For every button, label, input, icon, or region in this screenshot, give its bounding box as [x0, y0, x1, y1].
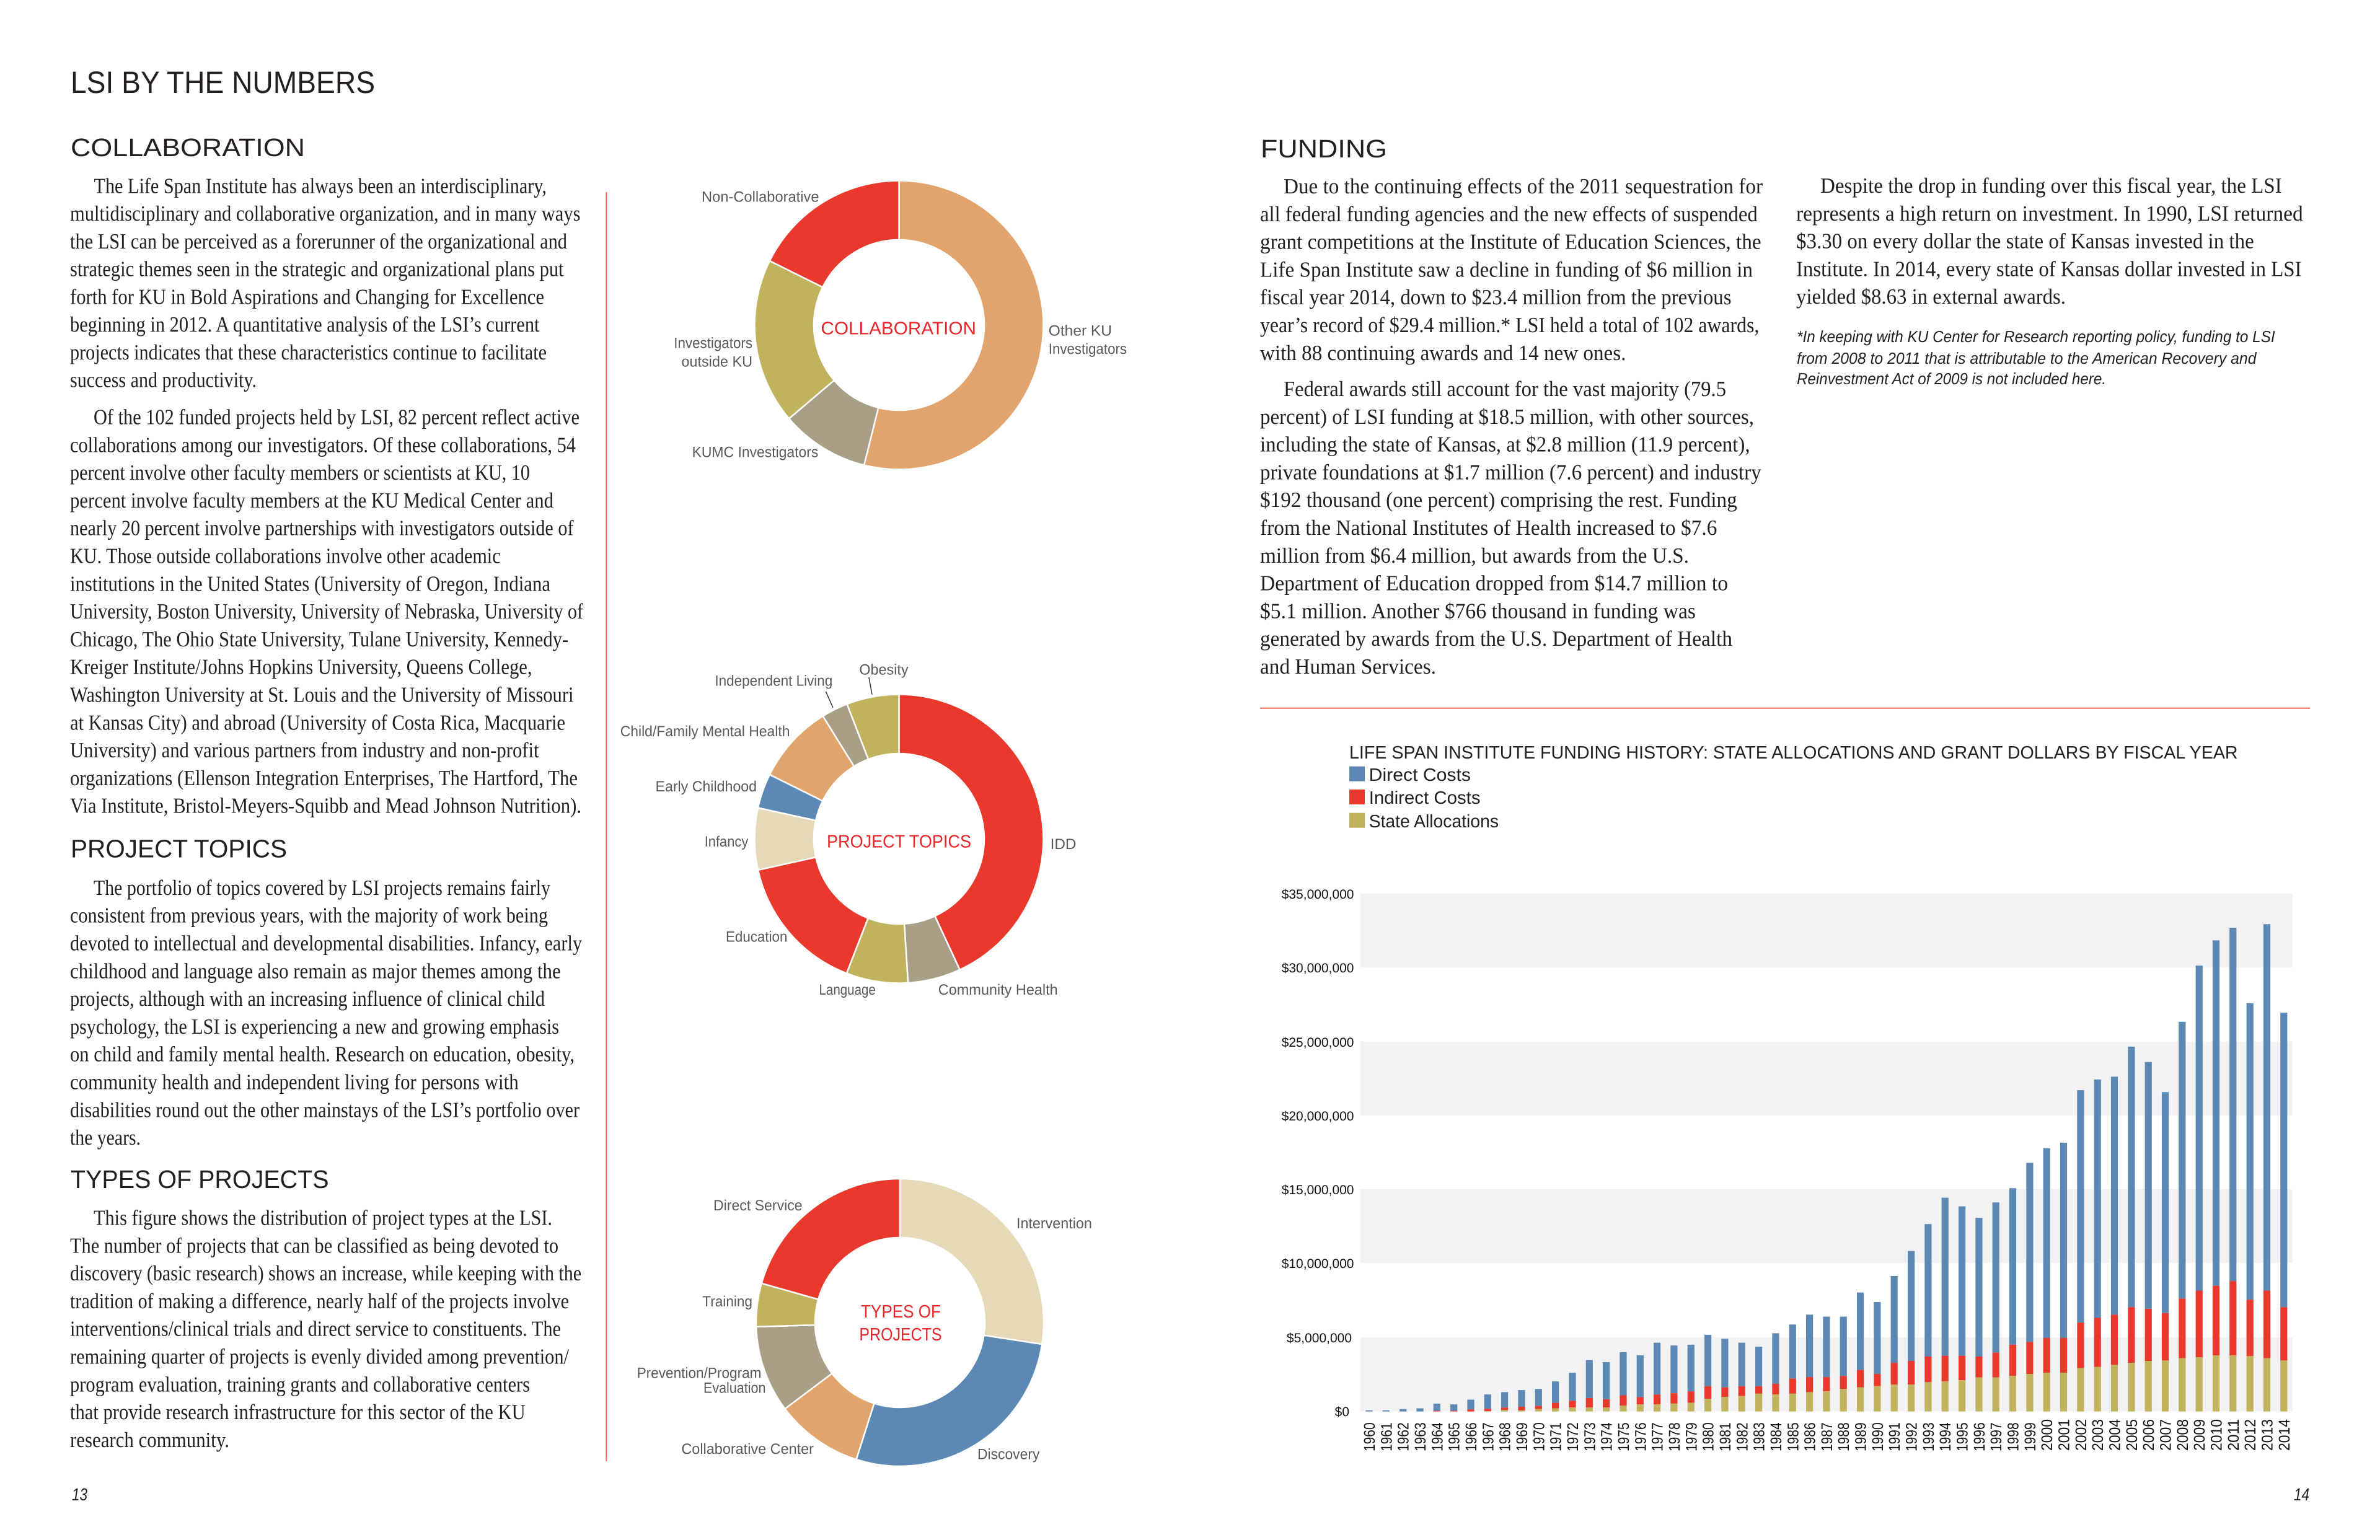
text block: collaboration paragraph 2: Via Institute, Bristol-Meyers-Squibb and Mead Johnson Nutrition).	[70, 794, 581, 818]
x axis year labels: 1975	[1615, 1422, 1633, 1451]
series: state allocations	[1488, 1355, 2284, 1412]
x axis year labels: 1982	[1734, 1422, 1751, 1451]
text block: funding paragraph 2: from the National Institutes of Health increased to $7.6	[1260, 516, 1717, 540]
segment: community health	[904, 916, 960, 983]
text block: collaboration paragraph 1: beginning in 2012. A quantitative analysis of the LSI’s current	[70, 312, 540, 337]
label: training: Training	[702, 1293, 752, 1310]
footnote	[1797, 327, 2275, 388]
segment: collaborative center	[785, 1373, 874, 1459]
segment: infancy	[755, 808, 816, 870]
x axis year labels: 1992	[1903, 1422, 1921, 1451]
text block: funding paragraph 2: Department of Education dropped from $14.7 million to	[1260, 571, 1728, 596]
x axis year labels: 1983	[1751, 1422, 1768, 1451]
text block: return on investment: Institute. In 2014, every state of Kansas dollar invested in LSI	[1796, 257, 2302, 281]
x axis year labels: 2012	[2242, 1419, 2259, 1451]
x axis year labels: 1980	[1700, 1422, 1717, 1451]
x axis year labels: 1972	[1564, 1422, 1582, 1451]
donut chart: types of projects	[637, 1179, 1092, 1466]
heading: project topics: PROJECT TOPICS	[71, 834, 287, 863]
text block: project topics: on child and family mental health. Research on education, obesity,	[70, 1042, 575, 1067]
text block: collaboration paragraph 2: percent involve faculty members at the KU Medical Center and	[70, 488, 553, 513]
segment: other KU investigators	[864, 181, 1043, 469]
segment: education	[758, 857, 868, 974]
chart title: LIFE SPAN INSTITUTE FUNDING HISTORY: STATE ALLOCATIONS AND GRANT DOLLARS BY FISCAL YEAR	[1349, 743, 2238, 763]
text block: types of projects: tradition of making a difference, nearly half of the projects involve	[70, 1289, 569, 1313]
text block: collaboration paragraph 2: percent involve other faculty members or scientists at KU, 10	[70, 460, 530, 485]
segment: intervention	[900, 1179, 1044, 1344]
vertical divider	[606, 192, 607, 1461]
text block: collaboration paragraph 2: institutions in the United States (University of Oregon, Indiana	[70, 571, 550, 596]
legend item: state allocations: State Allocations	[1369, 812, 1499, 832]
x axis year labels: 1987	[1818, 1422, 1836, 1451]
bars	[1369, 924, 2284, 1412]
text block: collaboration paragraph 2: collaborations among our investigators. Of these collaborations, 54	[70, 433, 576, 457]
x axis year labels: 1979	[1683, 1422, 1700, 1451]
footnote: from 2008 to 2011 that is attributable to the American Recovery and	[1797, 349, 2257, 367]
x axis year labels: 2000	[2038, 1419, 2056, 1451]
x axis year labels: 1996	[1971, 1422, 1988, 1451]
text block: types of projects: discovery (basic research) shows an increase, while keeping with the	[70, 1261, 581, 1285]
x axis year labels: 1974	[1598, 1422, 1616, 1451]
label: prevention/program evaluation	[637, 1365, 765, 1397]
segment: child/family mental health	[770, 716, 854, 801]
x axis year labels: 1961	[1378, 1422, 1395, 1451]
label: prevention/program evaluation: Prevention/Program	[637, 1365, 761, 1381]
text block: collaboration paragraph 1: success and productivity.	[70, 368, 257, 392]
text block: collaboration paragraph 2	[70, 405, 583, 818]
text block: project topics: consistent from previous years, with the majority of work being	[70, 904, 548, 928]
text block: project topics: childhood and language also remain as major themes among the	[70, 959, 561, 983]
text block: types of projects	[70, 1206, 581, 1452]
x axis year labels: 1966	[1463, 1422, 1480, 1451]
series: indirect costs	[1437, 1281, 2284, 1412]
text block: return on investment: Despite the drop in funding over this fiscal year, the LSI	[1820, 174, 2282, 198]
text block: project topics: psychology, the LSI is experiencing a new and growing emphasis	[70, 1014, 559, 1039]
center label: types of projects: TYPES OF	[861, 1302, 941, 1322]
x axis year labels: 1989	[1853, 1422, 1870, 1451]
text block: collaboration paragraph 1	[70, 174, 580, 392]
x axis year labels: 1960	[1361, 1422, 1378, 1451]
text block: collaboration paragraph 1: strategic themes seen in the strategic and organizational plans put	[70, 257, 564, 281]
label: KUMC investigators: KUMC Investigators	[692, 444, 818, 461]
label: other KU investigators: Investigators	[1049, 341, 1127, 358]
x axis year labels: 1994	[1937, 1422, 1954, 1451]
text block: types of projects: This figure shows the distribution of project types at the LSI.	[94, 1206, 552, 1230]
y axis labels: $10,000,000	[1282, 1257, 1354, 1271]
text block: funding paragraph 1: all federal funding agencies and the new effects of suspended	[1260, 202, 1758, 226]
x axis year labels: 1986	[1802, 1422, 1819, 1451]
text block: types of projects: research community.	[70, 1428, 229, 1452]
x axis year labels: 1997	[1988, 1422, 2005, 1451]
text block: return on investment: yielded $8.63 in external awards.	[1796, 284, 2066, 309]
text block: project topics: devoted to intellectual and developmental disabilities. Infancy, early	[70, 931, 582, 956]
text block: types of projects: interventions/clinical trials and direct service to constituents. The	[70, 1317, 561, 1341]
label: child/family mental health: Child/Family Mental Health	[620, 723, 790, 740]
segment: language	[847, 918, 908, 983]
x axis year labels	[1361, 1419, 2293, 1451]
text block: types of projects: remaining quarter of projects is evenly divided among prevention/	[70, 1345, 569, 1368]
text block: funding paragraph 2: private foundations at $1.7 million (7.6 percent) and industry	[1260, 460, 1761, 484]
text block: funding paragraph 1: grant competitions at the Institute of Education Sciences, the	[1260, 230, 1761, 254]
text block: project topics: disabilities round out the other mainstays of the LSI’s portfolio over	[70, 1098, 580, 1122]
segment: training	[756, 1283, 818, 1327]
x axis year labels: 1963	[1412, 1422, 1429, 1451]
x axis year labels: 1971	[1548, 1422, 1565, 1451]
title: LSI BY THE NUMBERS	[71, 65, 375, 100]
segment: obesity	[847, 694, 899, 759]
label: non-collaborative: Non-Collaborative	[702, 189, 819, 206]
segment: independent living	[823, 704, 868, 767]
y axis labels: $5,000,000	[1287, 1331, 1352, 1345]
text block: collaboration paragraph 2: Washington University at St. Louis and the University of Missouri	[70, 683, 574, 706]
page number 13: 13	[72, 1485, 87, 1504]
x axis year labels: 2011	[2225, 1419, 2242, 1451]
legend item: indirect costs: Indirect Costs	[1369, 788, 1481, 808]
x axis year labels: 1967	[1479, 1422, 1497, 1451]
label: intervention: Intervention	[1016, 1215, 1092, 1232]
label: direct service: Direct Service	[713, 1197, 803, 1214]
y axis labels: $20,000,000	[1282, 1109, 1354, 1124]
text block: funding paragraph 2: million from $6.4 million, but awards from the U.S.	[1260, 543, 1689, 568]
text block: return on investment	[1796, 174, 2303, 309]
x axis year labels: 1991	[1886, 1422, 1903, 1451]
x axis year labels: 1985	[1784, 1422, 1802, 1451]
x axis year labels: 2007	[2157, 1419, 2174, 1451]
y axis labels: $25,000,000	[1282, 1036, 1354, 1050]
heading: types of projects: TYPES OF PROJECTS	[71, 1165, 329, 1194]
text block: funding paragraph 1	[1260, 174, 1763, 365]
x axis year labels: 2014	[2276, 1419, 2293, 1451]
segment: IDD	[899, 694, 1043, 970]
text block: funding paragraph 1: with 88 continuing awards and 14 new ones.	[1260, 341, 1626, 365]
label: prevention/program evaluation: Evaluation	[703, 1380, 765, 1397]
bar chart: funding history	[1282, 743, 2293, 1451]
text block: collaboration paragraph 1: forth for KU in Bold Aspirations and Changing for Excellence	[70, 285, 544, 309]
x axis year labels: 2005	[2123, 1419, 2141, 1451]
center label: collaboration: COLLABORATION	[821, 319, 976, 338]
segment: investigators outside KU	[755, 261, 834, 419]
text block: collaboration paragraph 2: Chicago, The Ohio State University, Tulane University, Kennedy-	[70, 627, 568, 651]
leader line: independent living	[826, 692, 833, 708]
donut chart: project topics	[620, 661, 1076, 998]
legend item: direct costs: Direct Costs	[1369, 765, 1471, 785]
x axis year labels: 2002	[2073, 1419, 2090, 1451]
text block: collaboration paragraph 1: multidisciplinary and collaborative organization, and in many ways	[70, 201, 580, 226]
text block: types of projects: program evaluation, training grants and collaborative centers	[70, 1372, 530, 1396]
horizontal divider	[1260, 708, 2310, 709]
footnote: Reinvestment Act of 2009 is not included here.	[1797, 369, 2106, 388]
x axis year labels: 2006	[2140, 1419, 2157, 1451]
text block: collaboration paragraph 2: organizations (Ellenson Integration Enterprises, The Hartford, The	[70, 766, 578, 790]
heading: collaboration: COLLABORATION	[71, 133, 305, 162]
heading: funding: FUNDING	[1261, 134, 1387, 163]
text block: collaboration paragraph 1: The Life Span Institute has always been an interdisciplinary,	[94, 174, 547, 198]
label: community health: Community Health	[938, 982, 1058, 998]
x axis year labels: 2008	[2174, 1419, 2192, 1451]
segment: prevention/program evaluation	[756, 1325, 832, 1409]
text block: return on investment: $3.30 on every dollar the state of Kansas invested in the	[1796, 229, 2254, 253]
text block: funding paragraph 1: Due to the continuing effects of the 2011 sequestration for	[1284, 174, 1763, 198]
x axis year labels: 1964	[1429, 1422, 1446, 1451]
y axis labels	[1282, 887, 1354, 1419]
x axis year labels: 1990	[1869, 1422, 1887, 1451]
page number 14: 14	[2294, 1485, 2309, 1504]
text block: project topics: projects, although with an increasing influence of clinical child	[70, 987, 545, 1011]
text block: collaboration paragraph 2: Of the 102 funded projects held by LSI, 82 percent reflect active	[94, 405, 580, 429]
text block: types of projects: The number of projects that can be classified as being devoted to	[70, 1233, 558, 1257]
segment: KUMC investigators	[789, 381, 878, 465]
label: independent living: Independent Living	[715, 673, 832, 690]
text block: collaboration paragraph 1: the LSI can be perceived as a forerunner of the organizational and	[70, 229, 567, 253]
text block: collaboration paragraph 2: nearly 20 percent involve partnerships with investigators outside of	[70, 516, 574, 540]
text block: types of projects: that provide research infrastructure for this sector of the KU	[70, 1400, 526, 1424]
text block: collaboration paragraph 2: Kreiger Institute/Johns Hopkins University, Queens College,	[70, 655, 532, 679]
text block: collaboration paragraph 2: University, Boston University, University of Nebraska, University of	[70, 599, 583, 623]
leader line: obesity	[869, 677, 872, 695]
center label: types of projects	[859, 1302, 942, 1345]
segment: discovery	[857, 1335, 1042, 1466]
label: obesity: Obesity	[859, 661, 909, 678]
x axis year labels: 2003	[2089, 1419, 2107, 1451]
text block: funding paragraph 2: generated by awards from the U.S. Department of Health	[1260, 627, 1732, 651]
segment: non-collaborative	[770, 181, 899, 287]
label: discovery: Discovery	[977, 1446, 1039, 1463]
series: direct costs	[1369, 924, 2284, 1412]
x axis year labels: 1973	[1581, 1422, 1598, 1451]
x axis year labels: 1999	[2022, 1422, 2039, 1451]
x axis year labels: 2009	[2191, 1419, 2208, 1451]
text block: return on investment: represents a high return on investment. In 1990, LSI returned	[1796, 201, 2303, 226]
text block: funding paragraph 2	[1260, 377, 1761, 679]
text block: collaboration paragraph 2: University) and various partners from industry and non-profit	[70, 738, 539, 762]
x axis year labels: 1969	[1514, 1422, 1531, 1451]
footnote: *In keeping with KU Center for Research reporting policy, funding to LSI	[1797, 327, 2275, 346]
x axis year labels: 1998	[2004, 1422, 2022, 1451]
label: investigators outside KU	[674, 335, 752, 371]
segment: direct service	[762, 1179, 900, 1300]
text block: collaboration paragraph 2: KU. Those outside collaborations involve other academic	[70, 544, 501, 568]
x axis year labels: 1970	[1530, 1422, 1548, 1451]
y axis labels: $35,000,000	[1282, 887, 1354, 902]
x axis year labels: 1962	[1395, 1422, 1413, 1451]
x axis year labels: 1978	[1666, 1422, 1683, 1451]
text block: project topics: The portfolio of topics covered by LSI projects remains fairly	[94, 876, 550, 900]
text block: funding paragraph 1: Life Span Institute saw a decline in funding of $6 million in	[1260, 257, 1753, 281]
label: infancy: Infancy	[705, 834, 748, 850]
x axis year labels: 2004	[2106, 1419, 2123, 1451]
label: collaborative center: Collaborative Center	[681, 1441, 814, 1458]
text block: funding paragraph 2: Federal awards still account for the vast majority (79.5	[1284, 377, 1726, 401]
text block: project topics: community health and independent living for persons with	[70, 1070, 519, 1094]
x axis year labels: 1977	[1649, 1422, 1667, 1451]
text block: funding paragraph 2: percent) of LSI funding at $18.5 million, with other sources,	[1260, 405, 1754, 429]
y axis labels: $0	[1335, 1405, 1349, 1419]
label: language: Language	[819, 982, 876, 998]
text block: collaboration paragraph 1: projects indicates that these characteristics continue to facilitate	[70, 340, 547, 364]
y axis labels: $30,000,000	[1282, 961, 1354, 975]
text block: funding paragraph 2: $5.1 million. Another $766 thousand in funding was	[1260, 599, 1696, 623]
label: early childhood: Early Childhood	[656, 778, 757, 795]
label: education: Education	[726, 929, 787, 946]
x axis year labels: 1965	[1446, 1422, 1463, 1451]
x axis year labels: 1995	[1954, 1422, 1972, 1451]
label: investigators outside KU: Investigators	[674, 335, 752, 352]
label: investigators outside KU: outside KU	[681, 354, 752, 371]
center label: project topics: PROJECT TOPICS	[827, 832, 971, 852]
x axis year labels: 1981	[1717, 1422, 1734, 1451]
x axis year labels: 1993	[1920, 1422, 1937, 1451]
text block: collaboration paragraph 2: at Kansas City) and abroad (University of Costa Rica, Macquarie	[70, 710, 565, 734]
text block: funding paragraph 2: and Human Services.	[1260, 654, 1436, 679]
label: IDD: IDD	[1051, 836, 1076, 853]
text block: funding paragraph 2: including the state of Kansas, at $2.8 million (11.9 percent),	[1260, 433, 1750, 457]
x axis year labels: 1984	[1768, 1422, 1785, 1451]
x axis year labels: 1976	[1632, 1422, 1649, 1451]
x axis year labels: 2001	[2055, 1419, 2073, 1451]
text block: project topics	[70, 876, 582, 1150]
text block: project topics: the years.	[70, 1125, 141, 1150]
segment: early childhood	[758, 775, 822, 821]
legend	[1349, 765, 1499, 832]
x axis year labels: 2013	[2259, 1419, 2276, 1451]
y axis labels: $15,000,000	[1282, 1183, 1354, 1197]
donut chart: collaboration	[674, 181, 1127, 469]
x axis year labels: 2010	[2208, 1419, 2225, 1451]
text block: funding paragraph 1: fiscal year 2014, down to $23.4 million from the previous	[1260, 285, 1732, 309]
x axis year labels: 1988	[1835, 1422, 1853, 1451]
label: other KU investigators: Other KU	[1049, 323, 1112, 340]
center label: types of projects: PROJECTS	[859, 1325, 942, 1345]
label: other KU investigators	[1049, 323, 1127, 358]
x axis year labels: 1968	[1497, 1422, 1514, 1451]
chart bands	[1360, 894, 2292, 1412]
text block: funding paragraph 2: $192 thousand (one percent) comprising the rest. Funding	[1260, 488, 1737, 512]
text block: funding paragraph 1: year’s record of $29.4 million.* LSI held a total of 102 awards,	[1260, 313, 1759, 337]
